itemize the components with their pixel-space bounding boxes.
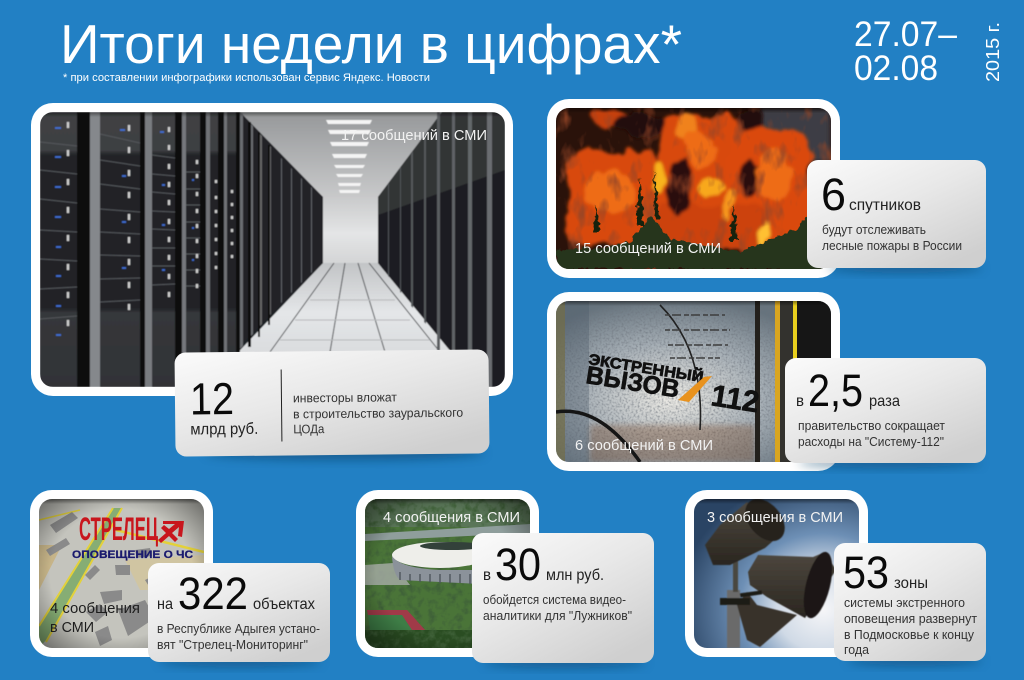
photo frame: [356, 490, 539, 657]
info card: 322 объектах: [148, 563, 330, 662]
card shadow: [205, 446, 485, 460]
black gaps between racks: [77, 112, 270, 387]
photo: server room corridor: [40, 112, 505, 387]
info card: 53 зоны: зоны: [894, 575, 928, 592]
info card: 12 млрд руб.: млрд руб.: [190, 421, 258, 438]
date range: 27.07–: [854, 15, 958, 54]
mentions label: 4 сообщения в СМИ: [383, 510, 520, 526]
photo: stadium: [365, 499, 530, 648]
info card: 30 млн руб.: 30: [495, 539, 541, 590]
panel: system 112: [547, 292, 986, 471]
mentions label: 3 сообщения в СМИ: [707, 510, 843, 526]
panel: forest fires: [547, 99, 986, 278]
info card: 6 спутников: лесные пожары в России: [822, 239, 962, 253]
info card: 2,5 раза: раза: [869, 393, 900, 410]
info card: 322 объектах: вят "Стрелец-Мониторинг": [157, 638, 308, 652]
photo frame: [685, 490, 868, 657]
title: Итоги недели в цифрах*: [60, 13, 682, 75]
info card: 30 млн руб.: в: [483, 567, 491, 584]
photo frame: [30, 490, 213, 657]
mentions label: [50, 600, 140, 636]
photo: Strelets city map: ОПОВЕЩЕНИЕ О ЧС: [72, 549, 193, 561]
year: 2015 г.: [983, 22, 1003, 82]
info card: 53 зоны: 53: [843, 547, 889, 598]
info card: 30 млн руб.: обойдется система видео-: [483, 593, 626, 607]
date range: 02.08: [854, 49, 938, 88]
info card: 53 зоны: в Подмосковье к концу: [844, 628, 975, 642]
info card: 6 спутников: будут отслеживать: [822, 223, 926, 237]
info card: 2,5 раза: [785, 358, 986, 463]
info card: 6 спутников: 6: [821, 169, 846, 220]
info card: 322 объектах: объектах: [253, 596, 315, 613]
photo: loudspeakers: [694, 491, 859, 648]
info card: 2,5 раза: правительство сокращает: [798, 419, 945, 433]
card shadow: [483, 658, 647, 668]
date range: [854, 15, 958, 88]
mentions label: в СМИ: [50, 619, 94, 636]
info card: 322 объектах: в Республике Адыгея устано-: [157, 622, 320, 636]
info card: 12 млрд руб.: 12: [190, 373, 234, 424]
mentions label: 15 сообщений в СМИ: [575, 241, 721, 257]
info card: 2,5 раза: расходы на "Систему-112": [798, 435, 944, 449]
info card: 322 объектах: 322: [178, 568, 248, 619]
info card: 6 спутников: спутников: [849, 197, 921, 214]
info card: 53 зоны: системы экстренного: [844, 596, 965, 610]
footnote: * при составлении инфографики использован сервис Яндекс. Новости: [63, 72, 430, 84]
mentions label: 6 сообщений в СМИ: [575, 438, 713, 454]
panel: Luzhniki: [356, 490, 654, 668]
info card: 53 зоны: года: [844, 643, 869, 657]
photo: emergency call logo: 112: [709, 379, 761, 419]
info card: 30 млн руб.: аналитики для "Лужников": [483, 609, 632, 623]
info card: 6 спутников: [807, 160, 986, 268]
info card: 12 млрд руб.: ЦОДа: [293, 422, 324, 436]
card shadow: [827, 263, 983, 273]
info card: 2,5 раза: в: [796, 393, 804, 410]
mentions label: 17 сообщений в СМИ: [341, 128, 487, 144]
photo: emergency call logo: ЭКСТРЕННЫЙ: [587, 350, 705, 386]
photo frame: [31, 103, 513, 396]
photo: forest fire: [556, 108, 831, 269]
info card: 322 объектах: на: [157, 596, 173, 613]
photo: Strelets city map: [39, 499, 204, 648]
info card: 53 зоны: оповещения развернут: [844, 612, 977, 626]
photo: emergency call logo: [556, 301, 831, 462]
info card: 2,5 раза: 2,5: [808, 365, 863, 416]
info card: 53 зоны: [834, 543, 986, 661]
info card: 12 млрд руб.: в строительство зауральского: [293, 406, 463, 421]
panel: Strelets monitoring: [30, 490, 330, 667]
photo: emergency call logo: ВЫЗОВ: [584, 361, 681, 404]
photo: Strelets city map: СТРЕЛЕЦ: [79, 511, 158, 547]
photo frame: [547, 99, 840, 278]
panel: warning sirens: [685, 490, 986, 666]
photo frame: [547, 292, 840, 471]
panel: data centre: [31, 103, 513, 460]
info card: 12 млрд руб.: инвесторы вложат: [293, 390, 397, 405]
info card: 30 млн руб.: млн руб.: [546, 567, 604, 584]
card shadow: [847, 656, 983, 666]
mentions label: 4 сообщения: [50, 600, 140, 617]
card shadow: [798, 458, 982, 468]
info card: 12 млрд руб.: [174, 349, 490, 457]
info card: 30 млн руб.: [472, 533, 654, 663]
card shadow: [158, 657, 322, 667]
